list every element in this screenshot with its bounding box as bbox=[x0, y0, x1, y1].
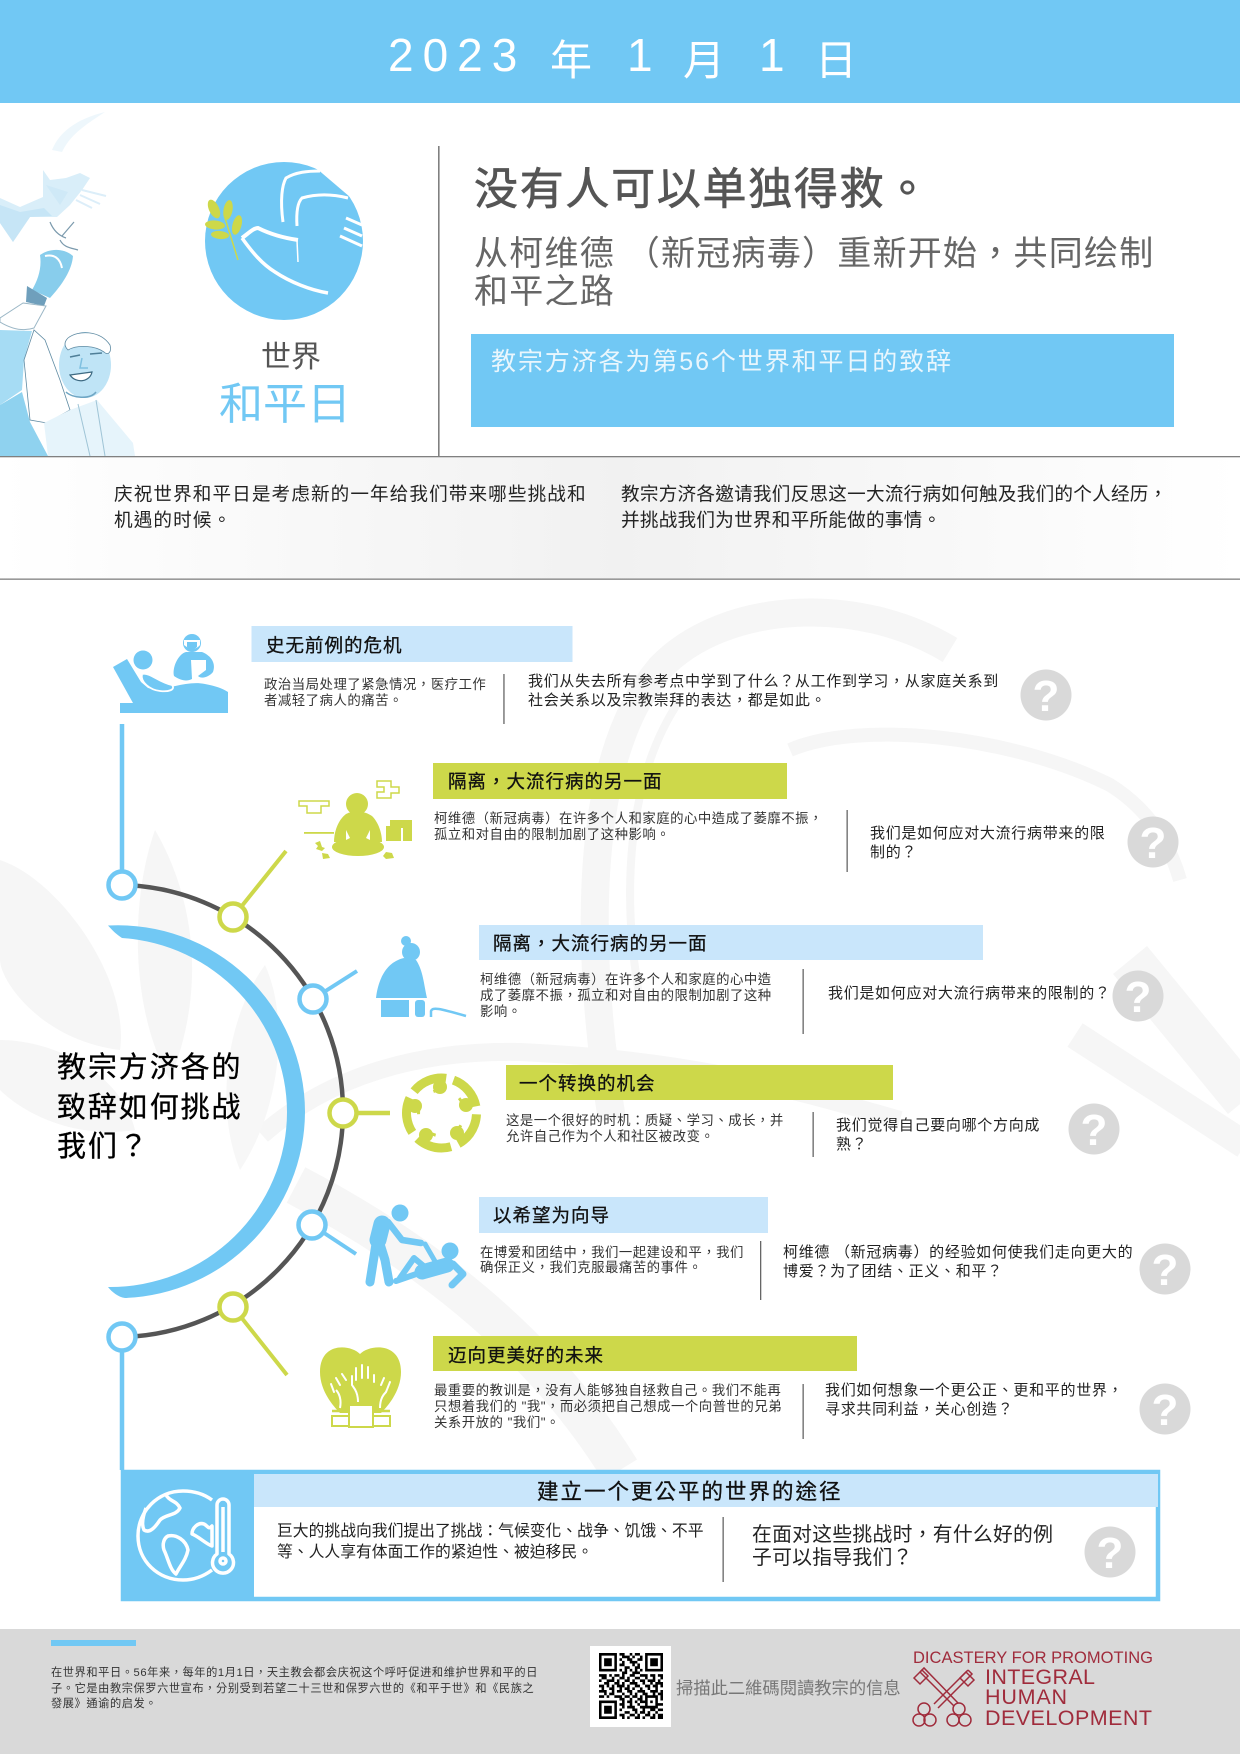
dicastery logo: DICASTERY FOR PROMOTING bbox=[913, 1649, 1153, 1667]
item 2: isolation: 制的？ bbox=[870, 844, 917, 861]
item 3: isolation: 我们是如何应对大流行病带来的限制的？ bbox=[828, 984, 1111, 1002]
item 6: towards a better future: 寻求共同利益，关心创造？ bbox=[825, 1401, 1013, 1418]
item 3: isolation: 柯维德（新冠病毒）在许多个人和家庭的心中造 bbox=[480, 971, 772, 987]
intro text right bbox=[621, 484, 1167, 530]
icon: heart with raised hands bbox=[320, 1347, 401, 1427]
dicastery logo: INTEGRAL bbox=[985, 1665, 1095, 1689]
icon: question mark: ? bbox=[1152, 1246, 1178, 1295]
icon: patient and doctor bbox=[113, 634, 228, 713]
date banner: 2023 bbox=[388, 29, 526, 81]
item 1: unprecedented crisis: 史无前例的危机 bbox=[266, 635, 403, 656]
icon: question mark bbox=[1068, 1104, 1120, 1155]
central crescent bbox=[108, 925, 305, 1298]
item 4: an opportunity for transformation: 允许自己作为个人和社区被改变。 bbox=[506, 1129, 714, 1144]
timeline nodes bbox=[108, 872, 356, 1350]
central question: 教宗方济各的 bbox=[57, 1051, 242, 1084]
subtitle banner bbox=[471, 334, 1174, 427]
item 6: towards a better future: 关系开放的 "我们"。 bbox=[434, 1415, 560, 1430]
title: 没有人可以单独得救。 bbox=[474, 165, 931, 214]
icon: question mark bbox=[1128, 816, 1178, 868]
logo: dove in circle bbox=[205, 160, 366, 320]
icon: crossed keys bbox=[913, 1668, 974, 1726]
logo label: world peace day bbox=[219, 341, 351, 429]
subtitle: 从柯维德 （新冠病毒）重新开始，共同绘制 bbox=[474, 235, 1154, 273]
icon: question mark bbox=[1084, 1526, 1136, 1578]
timeline: connecting lines bbox=[122, 724, 390, 1470]
intro text right: 并挑战我们为世界和平所能做的事情。 bbox=[621, 510, 941, 530]
panel: paths to a fairer world: 在面对这些挑战时，有什么好的例 bbox=[752, 1524, 1053, 1546]
footer note bbox=[51, 1665, 538, 1710]
intro text left: 庆祝世界和平日是考虑新的一年给我们带来哪些挑战和 bbox=[114, 484, 587, 504]
subtitle: 和平之路 bbox=[474, 273, 615, 311]
item 1: unprecedented crisis: 者减轻了病人的痛苦。 bbox=[264, 692, 403, 708]
icon: globe with thermometer bbox=[138, 1491, 233, 1580]
item 3: isolation: 影响。 bbox=[480, 1004, 522, 1019]
item 5: guided by hope: 以希望为向导 bbox=[493, 1205, 610, 1226]
dicastery logo bbox=[913, 1649, 1153, 1730]
intro text right: 教宗方济各邀请我们反思这一大流行病如何触及我们的个人经历， bbox=[621, 484, 1167, 504]
date banner: 月 bbox=[683, 37, 725, 84]
item 2: isolation: 我们是如何应对大流行病带来的限 bbox=[870, 824, 1106, 842]
icon: question mark bbox=[1140, 1244, 1190, 1295]
icon: question mark bbox=[1140, 1384, 1190, 1435]
date banner bbox=[0, 0, 1240, 103]
item 3: isolation: 隔离，大流行病的另一面 bbox=[493, 933, 708, 954]
icon: circle of people bbox=[397, 1068, 486, 1158]
QR code bbox=[590, 1646, 671, 1727]
dicastery logo: HUMAN bbox=[985, 1685, 1067, 1709]
icon: question mark bbox=[1112, 970, 1164, 1022]
item 2: isolation: 孤立和对自由的限制加剧了这种影响。 bbox=[434, 826, 670, 842]
item 6: towards a better future: 最重要的教训是，没有人能够独自拯救自己。我们不能再 bbox=[434, 1383, 781, 1398]
central question: 致辞如何挑战 bbox=[57, 1091, 242, 1124]
date banner: 日 bbox=[815, 37, 857, 84]
footer accent bar bbox=[51, 1640, 136, 1646]
icon: question mark: ? bbox=[1097, 1529, 1123, 1578]
dicastery logo: DEVELOPMENT bbox=[985, 1706, 1152, 1730]
intro text left: 机遇的时候。 bbox=[114, 510, 232, 530]
item 5: guided by hope: 在博爱和团结中，我们一起建设和平，我们 bbox=[480, 1244, 744, 1260]
item 1: unprecedented crisis bbox=[252, 626, 1072, 724]
item 4: an opportunity for transformation: 一个转换的机会 bbox=[519, 1073, 656, 1094]
item 5: guided by hope: 柯维德 （新冠病毒）的经验如何使我们走向更大的 bbox=[783, 1243, 1133, 1261]
item 2: isolation: 隔离，大流行病的另一面 bbox=[448, 771, 663, 792]
header divider bbox=[438, 146, 440, 457]
item 6: towards a better future: 我们如何想象一个更公正、更和平的世界， bbox=[825, 1382, 1123, 1399]
icon: question mark: ? bbox=[1140, 819, 1166, 868]
icon: question mark: ? bbox=[1125, 973, 1151, 1022]
date banner: 1 bbox=[759, 29, 785, 81]
icon: olive branch bbox=[205, 198, 244, 260]
item 2: isolation bbox=[433, 763, 1178, 872]
item 1: unprecedented crisis: 社会关系以及宗教崇拜的表达，都是如此。 bbox=[528, 692, 826, 709]
item 5: guided by hope: 博爱？为了团结、正义、和平？ bbox=[783, 1263, 1003, 1280]
item 4: an opportunity for transformation bbox=[506, 1065, 1120, 1157]
subtitle bbox=[474, 235, 1154, 311]
logo label: world peace day: 世界 bbox=[261, 341, 321, 374]
icon: question mark: ? bbox=[1033, 672, 1059, 721]
footer note: 子。它是由教宗保罗六世宣布，分别受到若望二十三世和保罗六世的《和平于世》和《民族之 bbox=[51, 1681, 534, 1695]
item 2: isolation: 柯维德（新冠病毒）在许多个人和家庭的心中造成了萎靡不振， bbox=[434, 810, 823, 826]
item 6: towards a better future bbox=[433, 1336, 1190, 1439]
icon: person helping another up bbox=[370, 1204, 463, 1285]
footer note: 在世界和平日。56年来，每年的1月1日，天主教会都会庆祝这个呼吁促进和维护世界和平的日 bbox=[51, 1665, 538, 1679]
item 1: unprecedented crisis: 我们从失去所有参考点中学到了什么？从工作到学习，从家庭关系到 bbox=[528, 673, 999, 690]
item 4: an opportunity for transformation: 我们觉得自己要向哪个方向成 bbox=[836, 1117, 1040, 1134]
subtitle banner: 教宗方济各为第56个世界和平日的致辞 bbox=[491, 348, 953, 376]
logo label: world peace day: 和平日 bbox=[219, 380, 351, 429]
panel: paths to a fairer world: 等、人人享有体面工作的紧迫性、被迫移民。 bbox=[277, 1542, 593, 1561]
illustration: pope and dove bbox=[0, 112, 135, 456]
panel: paths to a fairer world: 子可以指导我们？ bbox=[752, 1547, 913, 1569]
item 3: isolation: 成了萎靡不振，孤立和对自由的限制加剧了这种 bbox=[480, 987, 772, 1003]
date banner: 年 bbox=[550, 37, 592, 84]
intro band bbox=[0, 456, 1240, 580]
item 5: guided by hope: 确保正义，我们克服最痛苦的事件。 bbox=[480, 1259, 702, 1275]
icon: question mark: ? bbox=[1152, 1386, 1178, 1435]
panel: paths to a fairer world bbox=[121, 1470, 1158, 1601]
item 4: an opportunity for transformation: 这是一个很好的时机：质疑、学习、成长，并 bbox=[506, 1112, 784, 1128]
panel: paths to a fairer world: 建立一个更公平的世界的途径 bbox=[537, 1480, 843, 1504]
icon: isolated person with bricks bbox=[299, 781, 412, 859]
icon: question mark bbox=[1020, 670, 1072, 721]
background watermark swooshes and leaves bbox=[0, 612, 1240, 1470]
central question bbox=[57, 1051, 242, 1163]
item 6: towards a better future: 迈向更美好的未来 bbox=[448, 1345, 604, 1366]
QR caption: 掃描此二維碼閱讀教宗的信息 bbox=[676, 1678, 901, 1698]
footer note: 發展》通谕的启发。 bbox=[51, 1696, 157, 1710]
panel: paths to a fairer world: 巨大的挑战向我们提出了挑战：气候变化、战争、饥饿、不平 bbox=[277, 1522, 704, 1540]
date banner: 1 bbox=[627, 29, 653, 81]
footer band bbox=[0, 1629, 1240, 1754]
item 4: an opportunity for transformation: 熟？ bbox=[836, 1136, 867, 1153]
intro text left bbox=[114, 484, 587, 530]
item 1: unprecedented crisis: 政治当局处理了紧急情况，医疗工作 bbox=[264, 677, 486, 692]
item 6: towards a better future: 只想着我们的 "我"，而必须把自己想成一个向普世的兄弟 bbox=[434, 1398, 782, 1414]
item 3: isolation bbox=[479, 925, 1164, 1034]
icon: question mark: ? bbox=[1081, 1106, 1107, 1155]
item 5: guided by hope bbox=[479, 1197, 1190, 1300]
icon: elderly woman with cane bbox=[376, 936, 466, 1017]
central question: 我们？ bbox=[57, 1130, 150, 1163]
